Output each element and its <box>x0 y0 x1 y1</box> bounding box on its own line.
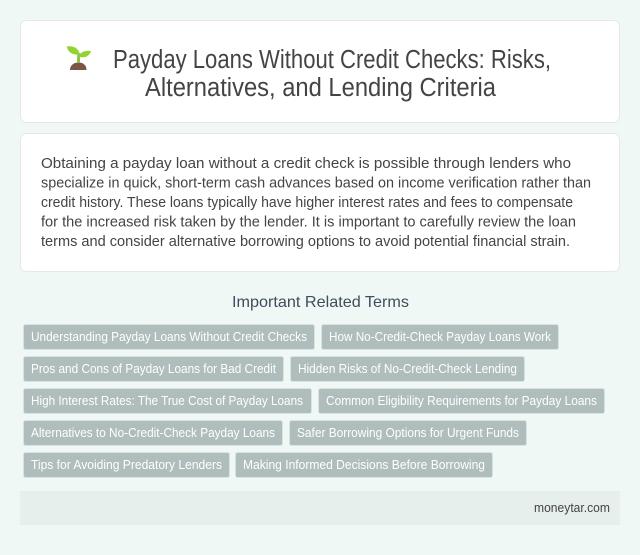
intro paragraph: for the increased risk taken by the lender. It is important to carefully review the loan <box>41 214 576 230</box>
footer <box>20 491 620 525</box>
tag: alternatives: Alternatives to No-Credit-Check Payday Loans <box>31 426 275 440</box>
tag: safer options <box>290 420 526 446</box>
tag: high interest: High Interest Rates: The True Cost of Payday Loans <box>31 394 303 408</box>
panel: title card <box>20 20 620 122</box>
tag: high interest <box>24 388 312 414</box>
tag list <box>24 324 604 478</box>
heading: important related terms: Important Related Terms <box>232 294 409 311</box>
tag: pros and cons: Pros and Cons of Payday Loans for Bad Credit <box>31 362 276 376</box>
title: Alternatives, and Lending Criteria <box>145 74 497 102</box>
title: Payday Loans Without Credit Checks: Risks, <box>113 46 551 74</box>
tag: predatory lenders <box>24 452 230 478</box>
tag: predatory lenders: Tips for Avoiding Predatory Lenders <box>31 458 222 472</box>
panel: introduction text <box>20 134 620 272</box>
tag: alternatives <box>24 420 282 446</box>
intro paragraph <box>41 156 591 250</box>
icon: seedling <box>67 46 91 70</box>
intro paragraph: specialize in quick, short-term cash advances based on income verification rather than <box>41 176 591 192</box>
tag: informed decisions: Making Informed Decisions Before Borrowing <box>243 458 485 472</box>
tag: how it works <box>322 324 558 350</box>
source: moneytar.com <box>534 501 610 515</box>
tag: safer options: Safer Borrowing Options for Urgent Funds <box>297 426 519 440</box>
intro paragraph: terms and consider alternative borrowing options to avoid potential financial strain. <box>41 234 570 250</box>
title <box>113 46 551 102</box>
tag: how it works: How No-Credit-Check Payday Loans Work <box>329 330 552 344</box>
tag: understanding <box>24 324 314 350</box>
tag: hidden risks: Hidden Risks of No-Credit-Check Lending <box>298 362 517 376</box>
tag: hidden risks <box>290 356 524 382</box>
intro paragraph: Obtaining a payday loan without a credit check is possible through lenders who <box>41 156 571 172</box>
tag: informed decisions <box>236 452 492 478</box>
tag: eligibility: Common Eligibility Requirements for Payday Loans <box>326 394 597 408</box>
tag: understanding: Understanding Payday Loans Without Credit Checks <box>31 330 307 344</box>
tag: pros and cons <box>24 356 284 382</box>
tag: eligibility <box>318 388 604 414</box>
intro paragraph: credit history. These loans typically have higher interest rates and fees to compensate <box>41 195 573 211</box>
